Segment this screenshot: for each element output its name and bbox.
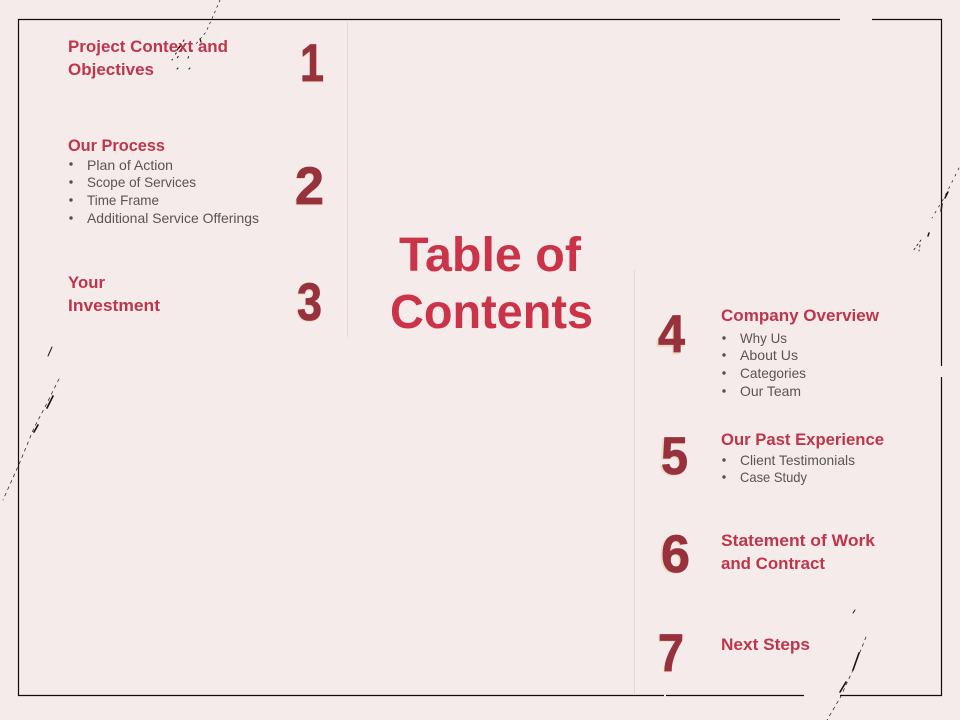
item 6: Statement of Work and Contract: and Contract	[721, 554, 825, 573]
item 1: Project Context and Objectives	[68, 37, 228, 79]
item 1: Project Context and Objectives: Project Context and	[68, 37, 228, 56]
item 4: Company Overview: Our Team	[740, 383, 801, 399]
item 2: Our Process: Plan of Action	[87, 157, 173, 173]
title: Table of	[399, 229, 582, 282]
item 6: Statement of Work and Contract	[721, 531, 876, 573]
left column: contents items 1 to 3	[68, 34, 324, 333]
item 2: Our Process: Our Process	[68, 136, 165, 155]
right column: contents items 4 to 7	[656, 305, 884, 684]
item 3: Your Investment: Your	[68, 273, 105, 292]
number 3: 3	[297, 273, 322, 332]
title: Contents	[390, 286, 593, 339]
item 7: Next Steps: Next Steps	[721, 635, 810, 654]
item 2: Our Process: Additional Service Offerings	[87, 210, 259, 226]
number 6: 6	[659, 526, 689, 585]
item 2: Our Process: Scope of Services	[87, 174, 196, 190]
item 2: Our Process	[68, 136, 259, 226]
item 5: Our Past Experience: Case Study	[740, 469, 807, 485]
item 4: Company Overview: Why Us	[740, 330, 787, 346]
number 4: 4	[658, 305, 685, 364]
item 1: Project Context and Objectives: Objectives	[68, 60, 154, 79]
item 3: Your Investment	[68, 273, 160, 315]
item 5: Our Past Experience: Our Past Experience	[721, 430, 884, 449]
number 3: 3	[296, 274, 322, 333]
item 4: Company Overview: About Us	[740, 347, 798, 363]
item 4: Company Overview: Company Overview	[721, 306, 880, 325]
item 2: Our Process: Time Frame	[87, 192, 159, 208]
number 6: 6	[661, 525, 690, 584]
item 6: Statement of Work and Contract: Statement of Work	[721, 531, 876, 550]
item 5: Our Past Experience	[721, 430, 884, 485]
number 7: 7	[657, 625, 684, 684]
number 5: 5	[659, 428, 687, 487]
number 5: 5	[661, 427, 688, 486]
item 5: Our Past Experience: Client Testimonials	[740, 452, 855, 468]
title	[390, 229, 593, 339]
item 4: Company Overview	[721, 306, 880, 399]
column dividers	[348, 20, 634, 695]
item 3: Your Investment: Investment	[68, 296, 160, 315]
number 7: 7	[658, 624, 684, 683]
number 2: 2	[294, 158, 324, 217]
number 1: 1	[300, 35, 324, 94]
number 4: 4	[656, 307, 684, 366]
item 4: Company Overview: Categories	[740, 365, 806, 381]
number 1: 1	[300, 34, 324, 93]
number 2: 2	[295, 157, 324, 216]
